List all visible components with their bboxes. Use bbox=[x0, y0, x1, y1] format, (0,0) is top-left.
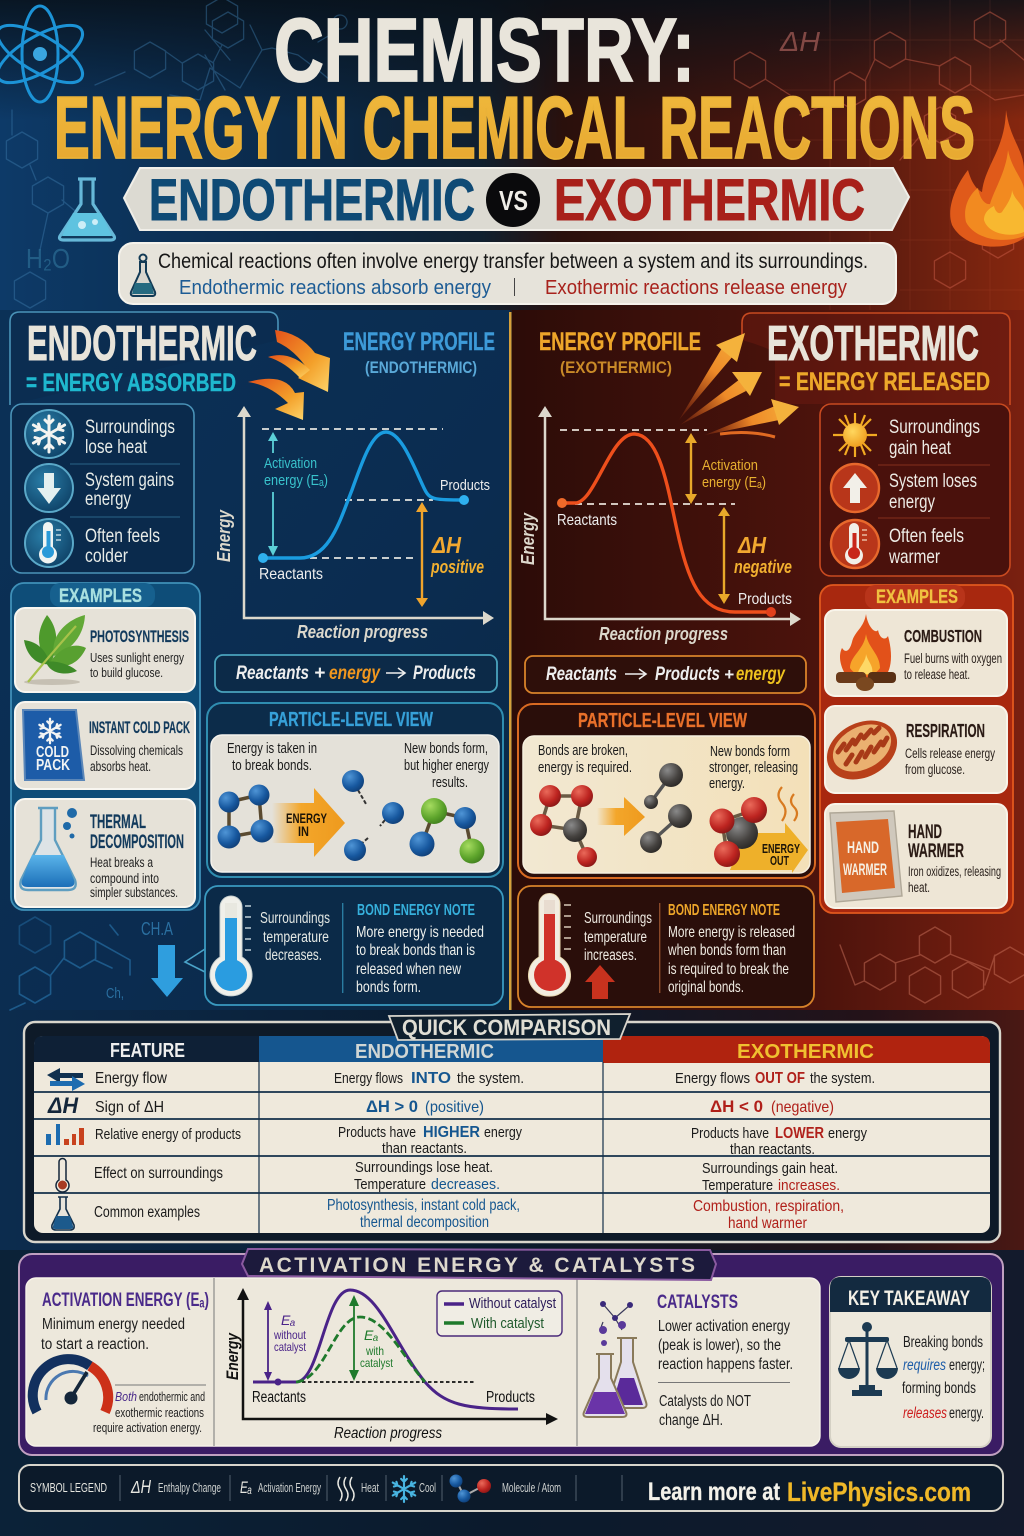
card: instant cold pack: INSTANT COLD PACK bbox=[89, 719, 190, 737]
equation: endothermic: + bbox=[314, 663, 325, 684]
card: instant cold pack: Dissolving chemicals bbox=[90, 743, 183, 758]
panel: examples endothermic: EXAMPLES bbox=[59, 586, 142, 607]
row: energy flow bbox=[47, 1068, 875, 1091]
icon: product molecule bbox=[410, 798, 484, 864]
card: instant cold pack: absorbs heat. bbox=[90, 759, 151, 774]
chart: endothermic energy profile: Reaction progress bbox=[297, 622, 428, 642]
row: sign of delta H: ΔH bbox=[47, 1093, 79, 1118]
row: common examples: Common examples bbox=[94, 1204, 200, 1221]
icon: broken molecule bbox=[342, 770, 404, 861]
footer: symbol legend: ΔH bbox=[130, 1477, 152, 1497]
row: effect on surroundings: increases. bbox=[778, 1177, 840, 1194]
panel: key takeaway: forming bonds bbox=[902, 1380, 976, 1397]
arrow: energy out: ENERGY bbox=[762, 841, 800, 856]
chart: exothermic energy profile bbox=[518, 406, 801, 644]
row: relative energy: HIGHER bbox=[423, 1124, 480, 1141]
footer: symbol legend: Cool bbox=[419, 1481, 436, 1495]
row: relative energy bbox=[46, 1124, 867, 1158]
card: instant cold pack bbox=[15, 702, 195, 789]
chart: catalyst comparison bbox=[223, 1288, 562, 1442]
equation: exothermic: + bbox=[724, 665, 734, 684]
panel: key takeaway: releases bbox=[903, 1405, 947, 1422]
panel: endothermic header bbox=[10, 312, 278, 405]
heading: energy profile exothermic: (EXOTHERMIC) bbox=[560, 358, 672, 377]
row: effect on surroundings: Effect on surroundings bbox=[94, 1165, 223, 1182]
icon: heat bbox=[338, 1477, 354, 1501]
arrow: temperature up bbox=[585, 965, 615, 999]
icon: thermometer red bbox=[529, 894, 571, 996]
chart: exothermic energy profile: negative bbox=[734, 557, 792, 577]
note: both reactions: endothermic and bbox=[139, 1390, 205, 1404]
panel: exothermic properties: System loses bbox=[889, 471, 977, 492]
panel: key takeaway: energy; bbox=[949, 1357, 985, 1374]
intro panel: Chemical reactions often involve energy transfer between a system and its surroundings. bbox=[158, 250, 868, 273]
panel: bond energy note exothermic: original bonds. bbox=[668, 979, 744, 996]
equation: endothermic: Reactants bbox=[236, 663, 309, 684]
card: respiration bbox=[817, 706, 1007, 793]
panel: endothermic header: ENDOTHERMIC bbox=[27, 317, 257, 371]
footer: symbol legend: Enthalpy Change bbox=[158, 1481, 221, 1495]
panel: bond energy note endothermic: decreases. bbox=[265, 947, 322, 964]
footer: symbol legend: Learn more at bbox=[648, 1478, 781, 1506]
card: hand warmer: HAND bbox=[847, 838, 879, 857]
panel: bond energy note endothermic bbox=[185, 886, 503, 1005]
panel: bond energy note exothermic: when bonds form than bbox=[667, 942, 786, 959]
text block: activation energy: Minimum energy needed bbox=[42, 1316, 185, 1333]
arrow: energy in bbox=[272, 788, 345, 857]
row: sign of delta H bbox=[47, 1093, 834, 1118]
panel: quick comparison bbox=[24, 1014, 1000, 1242]
row: sign of delta H: Sign of ΔH bbox=[95, 1099, 164, 1116]
icon: sun bbox=[833, 413, 877, 457]
title: CHEMISTRY: bbox=[274, 1, 695, 101]
text block: catalysts: Lower activation energy bbox=[658, 1318, 790, 1335]
panel: bond energy note endothermic: bonds form. bbox=[356, 979, 421, 996]
panel: bond energy note endothermic: released when new bbox=[356, 961, 461, 978]
chart: catalyst comparison: Eₐ bbox=[281, 1312, 295, 1328]
chart: catalyst comparison: Products bbox=[486, 1389, 535, 1406]
panel: endothermic properties: Often feels bbox=[85, 526, 160, 547]
card: hand warmer bbox=[825, 804, 1007, 908]
chart: endothermic energy profile: Products bbox=[440, 477, 490, 494]
icon: flask bbox=[60, 179, 114, 240]
footer: symbol legend: Eₐ bbox=[240, 1478, 252, 1497]
icon: flame bbox=[950, 110, 1024, 247]
heading: energy profile exothermic bbox=[539, 328, 701, 377]
footer: symbol legend: Molecule / Atom bbox=[502, 1481, 561, 1495]
panel: key takeaway: Breaking bonds bbox=[903, 1334, 983, 1351]
text block: catalysts bbox=[657, 1292, 793, 1429]
title bbox=[54, 1, 975, 177]
panel: bond energy note endothermic: to break bonds than is bbox=[356, 942, 475, 959]
icon: thermometer blue bbox=[210, 896, 252, 996]
card: thermal decomposition bbox=[15, 799, 195, 907]
panel: examples exothermic bbox=[817, 585, 1013, 913]
arrow: energy out bbox=[730, 823, 808, 873]
panel: exothermic properties bbox=[820, 404, 1010, 576]
panel: particle-level view exothermic: energy is required. bbox=[538, 760, 632, 776]
legend: catalyst lines bbox=[437, 1291, 562, 1336]
arrow: energy in: ENERGY bbox=[286, 811, 327, 826]
chart: catalyst comparison: catalyst bbox=[274, 1340, 307, 1354]
card: thermal decomposition: THERMAL bbox=[90, 811, 146, 833]
panel: particle-level view endothermic: results. bbox=[432, 775, 468, 791]
row: energy flow: Energy flow bbox=[95, 1070, 168, 1087]
note: both reactions: exothermic reactions bbox=[115, 1406, 204, 1420]
panel: particle-level view exothermic: Bonds are broken, bbox=[538, 743, 628, 759]
icon: snowflake bbox=[25, 410, 73, 458]
icon: molecule bbox=[450, 1474, 491, 1502]
icon: reactant molecule bbox=[218, 784, 274, 848]
intro panel bbox=[119, 243, 896, 304]
panel: exothermic properties: gain heat bbox=[889, 438, 952, 459]
page background: Ch, bbox=[106, 985, 124, 1002]
icon: thermometer cold bbox=[25, 519, 73, 567]
ribbon: endothermic vs exothermic bbox=[124, 168, 909, 233]
card: combustion bbox=[825, 610, 1007, 696]
page background: CH.A bbox=[141, 919, 173, 939]
panel: bond energy note endothermic: More energy is needed bbox=[356, 924, 484, 941]
note: both reactions: require activation energy. bbox=[93, 1421, 202, 1435]
panel: endothermic properties: System gains bbox=[85, 470, 174, 491]
panel: particle-level view endothermic bbox=[207, 703, 503, 877]
row: sign of delta H: ΔH < 0 bbox=[710, 1097, 763, 1116]
row: effect on surroundings: decreases. bbox=[431, 1176, 500, 1193]
panel: particle-level view endothermic: to break bonds. bbox=[232, 758, 312, 774]
panel: endothermic properties: colder bbox=[85, 546, 129, 567]
icon: cool bbox=[393, 1476, 415, 1502]
table header: ENDOTHERMIC bbox=[355, 1041, 494, 1063]
intro panel: Endothermic reactions absorb energy bbox=[179, 277, 491, 299]
chart: exothermic energy profile: Energy bbox=[518, 512, 538, 565]
card: photosynthesis: to build glucose. bbox=[90, 665, 163, 680]
panel: examples endothermic bbox=[11, 583, 200, 910]
text block: activation energy: ACTIVATION ENERGY (Eₐ) bbox=[42, 1290, 209, 1311]
card: thermal decomposition: DECOMPOSITION bbox=[90, 831, 184, 853]
card: combustion: to release heat. bbox=[904, 667, 970, 682]
icon: separated atoms bbox=[640, 763, 692, 853]
equation: exothermic: Products bbox=[655, 664, 720, 685]
panel: particle-level view exothermic: PARTICLE-LEVEL VIEW bbox=[578, 710, 747, 732]
equation: endothermic: Products bbox=[413, 663, 476, 684]
footer: symbol legend: Activation Energy bbox=[258, 1481, 321, 1495]
arrow: temperature down bbox=[151, 945, 183, 997]
panel: examples exothermic: EXAMPLES bbox=[876, 587, 958, 608]
ribbon: endothermic vs exothermic: VS bbox=[499, 185, 528, 216]
card: hand warmer: WARMER bbox=[843, 860, 887, 879]
arrows: energy leaving bbox=[679, 333, 799, 437]
icon: down arrow bbox=[25, 464, 73, 512]
arrows: energy entering bbox=[248, 330, 330, 420]
row: relative energy: Products have bbox=[338, 1124, 416, 1141]
row: relative energy: Products have bbox=[691, 1125, 769, 1142]
heading: energy profile endothermic: ENERGY PROFILE bbox=[343, 328, 495, 356]
text block: catalysts: reaction happens faster. bbox=[658, 1356, 793, 1373]
row: energy flow: Energy flows bbox=[334, 1070, 403, 1087]
row: effect on surroundings: Surroundings lose heat. bbox=[355, 1159, 493, 1176]
panel: bond energy note exothermic: More energy is released bbox=[668, 924, 795, 941]
row: common examples: hand warmer bbox=[728, 1215, 807, 1232]
card: hand warmer: WARMER bbox=[908, 840, 964, 862]
page background: H₂O bbox=[26, 243, 70, 274]
row: effect on surroundings: Temperature bbox=[354, 1176, 426, 1193]
intro panel: Exothermic reactions release energy bbox=[545, 277, 847, 299]
chart: exothermic energy profile: Reactants bbox=[557, 512, 617, 529]
chart: endothermic energy profile: Activation bbox=[264, 455, 317, 472]
chart: endothermic energy profile: ΔH bbox=[431, 532, 461, 558]
panel: bond energy note endothermic: Surroundings bbox=[260, 910, 330, 927]
row: sign of delta H: ΔH > 0 bbox=[366, 1097, 418, 1116]
ribbon: endothermic vs exothermic: EXOTHERMIC bbox=[554, 168, 865, 233]
table header bbox=[34, 1036, 990, 1063]
chart: endothermic energy profile: energy (Eₐ) bbox=[264, 472, 328, 489]
chart: endothermic energy profile: Energy bbox=[214, 509, 234, 562]
row: effect on surroundings bbox=[56, 1158, 840, 1194]
row: sign of delta H: (negative) bbox=[771, 1099, 834, 1116]
note: both reactions: Both bbox=[115, 1390, 137, 1404]
chart: catalyst comparison: Eₐ bbox=[364, 1327, 378, 1343]
row: common examples bbox=[52, 1197, 844, 1232]
panel: bond energy note exothermic: temperature bbox=[584, 929, 647, 946]
text block: activation energy: to start a reaction. bbox=[41, 1336, 149, 1353]
card: combustion: COMBUSTION bbox=[904, 626, 982, 646]
tab: quick comparison: QUICK COMPARISON bbox=[402, 1015, 611, 1040]
panel: endothermic properties bbox=[11, 404, 194, 573]
equation: endothermic bbox=[215, 655, 497, 692]
card: thermal decomposition: compound into bbox=[90, 871, 159, 886]
icon: atom bbox=[0, 6, 91, 102]
row: energy flow: INTO bbox=[411, 1070, 451, 1087]
equation: exothermic bbox=[525, 656, 806, 693]
chart: exothermic energy profile: Reaction progress bbox=[599, 624, 728, 644]
panel: key takeaway: KEY TAKEAWAY bbox=[848, 1287, 970, 1310]
text block: activation energy bbox=[41, 1290, 209, 1353]
chart: catalyst comparison: Reactants bbox=[252, 1389, 306, 1406]
footer: symbol legend: Heat bbox=[361, 1481, 379, 1495]
footer: symbol legend: SYMBOL LEGEND bbox=[30, 1480, 107, 1495]
panel: bond energy note endothermic: temperature bbox=[263, 929, 329, 946]
panel: bond energy note exothermic bbox=[518, 886, 814, 1007]
chart: catalyst comparison: with bbox=[365, 1344, 384, 1358]
text block: catalysts: (peak is lower), so the bbox=[658, 1337, 781, 1354]
panel: endothermic header: = ENERGY ABSORBED bbox=[26, 369, 236, 397]
row: common examples: thermal decomposition bbox=[360, 1214, 489, 1231]
tab: activation energy and catalysts: ACTIVATION ENERGY & CATALYSTS bbox=[259, 1254, 695, 1277]
row: sign of delta H: (positive) bbox=[425, 1099, 484, 1116]
panel: key takeaway bbox=[830, 1277, 991, 1447]
panel: exothermic properties: energy bbox=[889, 492, 935, 513]
text block: catalysts: CATALYSTS bbox=[657, 1292, 738, 1313]
chart: exothermic energy profile: ΔH bbox=[737, 532, 766, 558]
row: common examples: Photosynthesis, instant cold pack, bbox=[327, 1197, 520, 1214]
card: photosynthesis: Uses sunlight energy bbox=[90, 650, 184, 665]
chart: exothermic energy profile: Activation bbox=[702, 457, 758, 474]
legend: catalyst lines: With catalyst bbox=[471, 1316, 544, 1332]
panel: exothermic properties: warmer bbox=[888, 547, 941, 568]
equation: exothermic: energy bbox=[736, 664, 786, 685]
card: hand warmer: heat. bbox=[908, 880, 930, 895]
footer: symbol legend bbox=[19, 1465, 1003, 1511]
table header: EXOTHERMIC bbox=[737, 1041, 874, 1063]
chart: endothermic energy profile: positive bbox=[430, 557, 484, 577]
legend: catalyst lines: Without catalyst bbox=[469, 1296, 556, 1312]
row: relative energy: than reactants. bbox=[730, 1141, 815, 1158]
card: photosynthesis bbox=[15, 608, 195, 692]
row: energy flow: the system. bbox=[457, 1070, 524, 1087]
row: effect on surroundings: Surroundings gain heat. bbox=[702, 1160, 838, 1177]
icon: product molecule bbox=[710, 797, 767, 867]
chart: catalyst comparison: Energy bbox=[223, 1332, 242, 1380]
icon: balance scales bbox=[838, 1322, 898, 1396]
panel: particle-level view exothermic: New bonds form bbox=[710, 744, 790, 760]
row: relative energy: LOWER bbox=[775, 1125, 824, 1142]
text block: catalysts: change ΔH. bbox=[659, 1412, 723, 1429]
icon: reactant molecule bbox=[530, 785, 597, 867]
row: relative energy: energy bbox=[828, 1125, 867, 1142]
panel: particle-level view endothermic: but higher energy bbox=[404, 758, 490, 774]
page background: ΔH bbox=[779, 26, 821, 57]
card: photosynthesis: PHOTOSYNTHESIS bbox=[90, 628, 189, 646]
panel: particle-level view endothermic: New bonds form, bbox=[404, 741, 488, 757]
table header: FEATURE bbox=[110, 1040, 185, 1062]
panel: bond energy note exothermic: Surroundings bbox=[584, 910, 652, 927]
row: relative energy: energy bbox=[484, 1124, 522, 1141]
panel: exothermic header bbox=[742, 313, 1010, 405]
panel: endothermic properties: energy bbox=[85, 489, 131, 510]
note: both reactions bbox=[93, 1384, 206, 1435]
chart: exothermic energy profile: Products bbox=[738, 591, 792, 608]
card: respiration: from glucose. bbox=[905, 762, 965, 777]
panel: particle-level view exothermic bbox=[518, 704, 815, 878]
icon: gauge bbox=[33, 1359, 108, 1412]
card: hand warmer: HAND bbox=[908, 821, 942, 843]
equation: endothermic: energy bbox=[329, 663, 381, 684]
footer: symbol legend: LivePhysics.com bbox=[787, 1477, 971, 1507]
card: instant cold pack: COLD bbox=[36, 744, 69, 761]
panel: key takeaway: requires bbox=[903, 1357, 946, 1374]
chart: endothermic energy profile: Reactants bbox=[259, 566, 323, 583]
arrow: energy in: IN bbox=[298, 824, 309, 839]
panel: activation energy and catalysts bbox=[19, 1249, 1003, 1455]
panel: bond energy note exothermic: BOND ENERGY NOTE bbox=[668, 902, 780, 919]
row: common examples: Combustion, respiration, bbox=[693, 1198, 844, 1215]
card: thermal decomposition: Heat breaks a bbox=[90, 855, 153, 870]
chart: exothermic energy profile: energy (Eₐ) bbox=[702, 474, 766, 491]
row: energy flow: OUT OF bbox=[755, 1070, 805, 1087]
panel: particle-level view exothermic: energy. bbox=[709, 776, 745, 792]
panel: particle-level view endothermic: Energy is taken in bbox=[227, 741, 317, 757]
panel: bond energy note exothermic: increases. bbox=[584, 947, 637, 964]
panel: bond energy note exothermic: is required to break the bbox=[668, 961, 789, 978]
heading: energy profile exothermic: ENERGY PROFILE bbox=[539, 328, 701, 356]
chart: catalyst comparison: without bbox=[273, 1328, 307, 1342]
card: instant cold pack: PACK bbox=[36, 757, 71, 774]
panel: endothermic properties: lose heat bbox=[85, 437, 148, 458]
row: effect on surroundings: Temperature bbox=[702, 1177, 773, 1194]
tab: activation energy and catalysts bbox=[242, 1249, 716, 1280]
card: thermal decomposition: simpler substances. bbox=[90, 885, 178, 900]
panel: particle-level view endothermic: PARTICLE-LEVEL VIEW bbox=[269, 709, 433, 731]
icon: heat waves bbox=[778, 787, 797, 821]
heading: energy profile endothermic: (ENDOTHERMIC) bbox=[365, 358, 477, 377]
row: relative energy: Relative energy of products bbox=[95, 1126, 241, 1143]
text block: catalysts: Catalysts do NOT bbox=[659, 1393, 751, 1410]
panel: particle-level view exothermic: stronger, releasing bbox=[709, 760, 798, 776]
row: energy flow: Energy flows bbox=[675, 1070, 750, 1087]
icon: catalyst flasks bbox=[584, 1301, 646, 1417]
equation: exothermic: Reactants bbox=[546, 664, 617, 685]
panel: exothermic properties: Surroundings bbox=[889, 417, 980, 438]
heading: energy profile endothermic bbox=[343, 328, 495, 377]
panel: key takeaway: energy. bbox=[949, 1405, 984, 1422]
arrow: reaction bbox=[597, 797, 645, 836]
chart: catalyst comparison: catalyst bbox=[360, 1356, 394, 1370]
panel: bond energy note endothermic: BOND ENERGY NOTE bbox=[357, 902, 475, 919]
ribbon: endothermic vs exothermic: ENDOTHERMIC bbox=[149, 168, 475, 233]
icon: up arrow bbox=[831, 464, 879, 512]
arrow: energy out: OUT bbox=[770, 853, 789, 868]
chart: catalyst comparison: Reaction progress bbox=[334, 1425, 442, 1442]
row: relative energy: than reactants. bbox=[382, 1140, 467, 1157]
chart: endothermic energy profile bbox=[214, 406, 494, 642]
panel: endothermic properties: Surroundings bbox=[85, 417, 175, 438]
icon: thermometer warm bbox=[831, 520, 879, 568]
panel: exothermic properties: Often feels bbox=[889, 526, 964, 547]
row: energy flow: the system. bbox=[810, 1070, 875, 1087]
